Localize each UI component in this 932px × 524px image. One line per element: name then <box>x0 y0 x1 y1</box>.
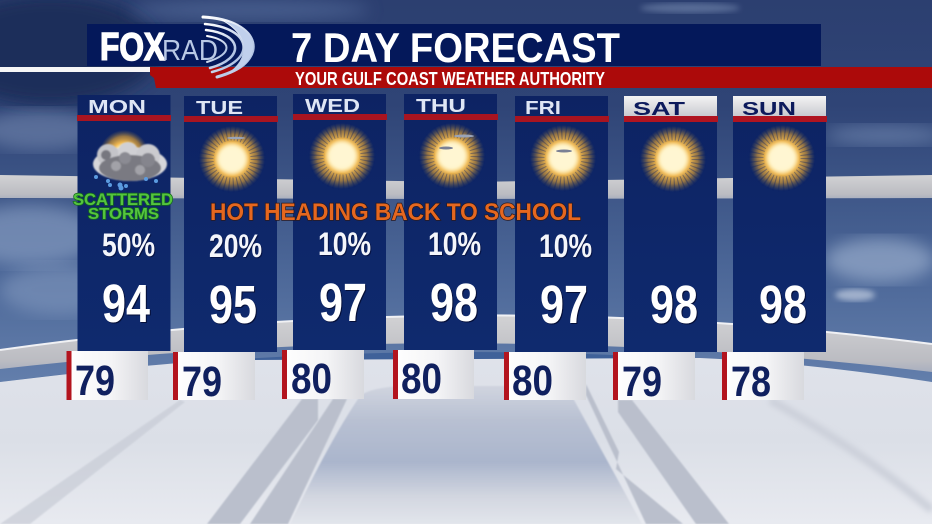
panel: Friday: 10% <box>539 228 592 264</box>
panel: Monday: MON <box>88 97 146 117</box>
panel: Wednesday: 10% <box>318 226 371 262</box>
panel: Saturday <box>624 96 718 352</box>
title: 7 DAY FORECAST <box>291 24 620 71</box>
background: stage rail <box>0 315 932 524</box>
panel: Sunday: 98 <box>759 275 807 335</box>
logo: FOX RAD: RAD <box>162 35 218 67</box>
panel: Sunday <box>733 96 827 352</box>
icon: sun <box>749 125 815 191</box>
low temp: Sunday: 78 <box>731 358 771 406</box>
icon: sun <box>309 123 375 189</box>
panel: Tuesday: TUE <box>196 98 243 118</box>
background: stage floor <box>0 358 932 524</box>
subtitle: YOUR GULF COAST WEATHER AUTHORITY <box>295 69 605 89</box>
panel: Saturday: SAT <box>633 99 685 119</box>
white rule <box>0 67 150 72</box>
low temp: Wednesday: 80 <box>291 355 332 403</box>
panel: Monday: 94 <box>102 274 150 334</box>
low temp: Tuesday: 79 <box>182 358 222 406</box>
icon: sun <box>530 125 596 191</box>
label: scattered storms <box>73 190 173 223</box>
panel: Friday: FRI <box>525 98 561 118</box>
panel: Thursday <box>404 94 498 350</box>
header panel <box>87 24 821 66</box>
logo: FOX RAD: FOX <box>100 26 165 69</box>
callout: hot heading back to school: HOT HEADING BACK TO SCHOOL <box>210 199 581 226</box>
panel: Saturday: 98 <box>650 275 698 335</box>
panel: Friday: 97 <box>540 275 588 335</box>
low temp: Tuesday <box>173 352 255 406</box>
panel: Thursday: 98 <box>430 273 478 333</box>
panel: Sunday: SUN <box>742 99 796 119</box>
panel: Wednesday <box>293 94 387 350</box>
label: scattered storms: SCATTERED <box>73 190 173 209</box>
panel: Wednesday: WED <box>305 96 360 116</box>
panel: Wednesday: 97 <box>319 273 367 333</box>
background: horizon band <box>0 175 932 199</box>
panel: Monday: 50% <box>102 227 155 263</box>
panel: Thursday: 10% <box>428 226 481 262</box>
icon: sun <box>199 126 265 192</box>
panel: Tuesday: 95 <box>209 275 257 335</box>
icon: storm cloud with sun <box>93 130 167 190</box>
icon: sun <box>419 123 485 189</box>
panel: Monday <box>73 95 173 351</box>
low temp: Thursday: 80 <box>401 355 442 403</box>
low temp: Thursday <box>393 350 474 403</box>
red banner <box>150 67 932 88</box>
low temp: Friday <box>504 352 586 405</box>
panel: Thursday: THU <box>416 96 466 116</box>
low temp: Monday: 79 <box>75 357 115 405</box>
label: scattered storms: STORMS <box>88 206 159 223</box>
panel: Tuesday <box>184 96 278 352</box>
low temp: Sunday <box>722 352 804 406</box>
low temp: Saturday: 79 <box>622 358 662 406</box>
low temp: Friday: 80 <box>512 357 553 405</box>
panel: Friday <box>515 96 609 352</box>
icon: sun <box>640 126 706 192</box>
logo: FOX RAD <box>100 17 254 77</box>
low temp: Wednesday <box>282 350 364 403</box>
low temp: Monday <box>66 351 148 405</box>
panel: Tuesday: 20% <box>209 228 262 264</box>
low temp: Saturday <box>613 352 695 406</box>
